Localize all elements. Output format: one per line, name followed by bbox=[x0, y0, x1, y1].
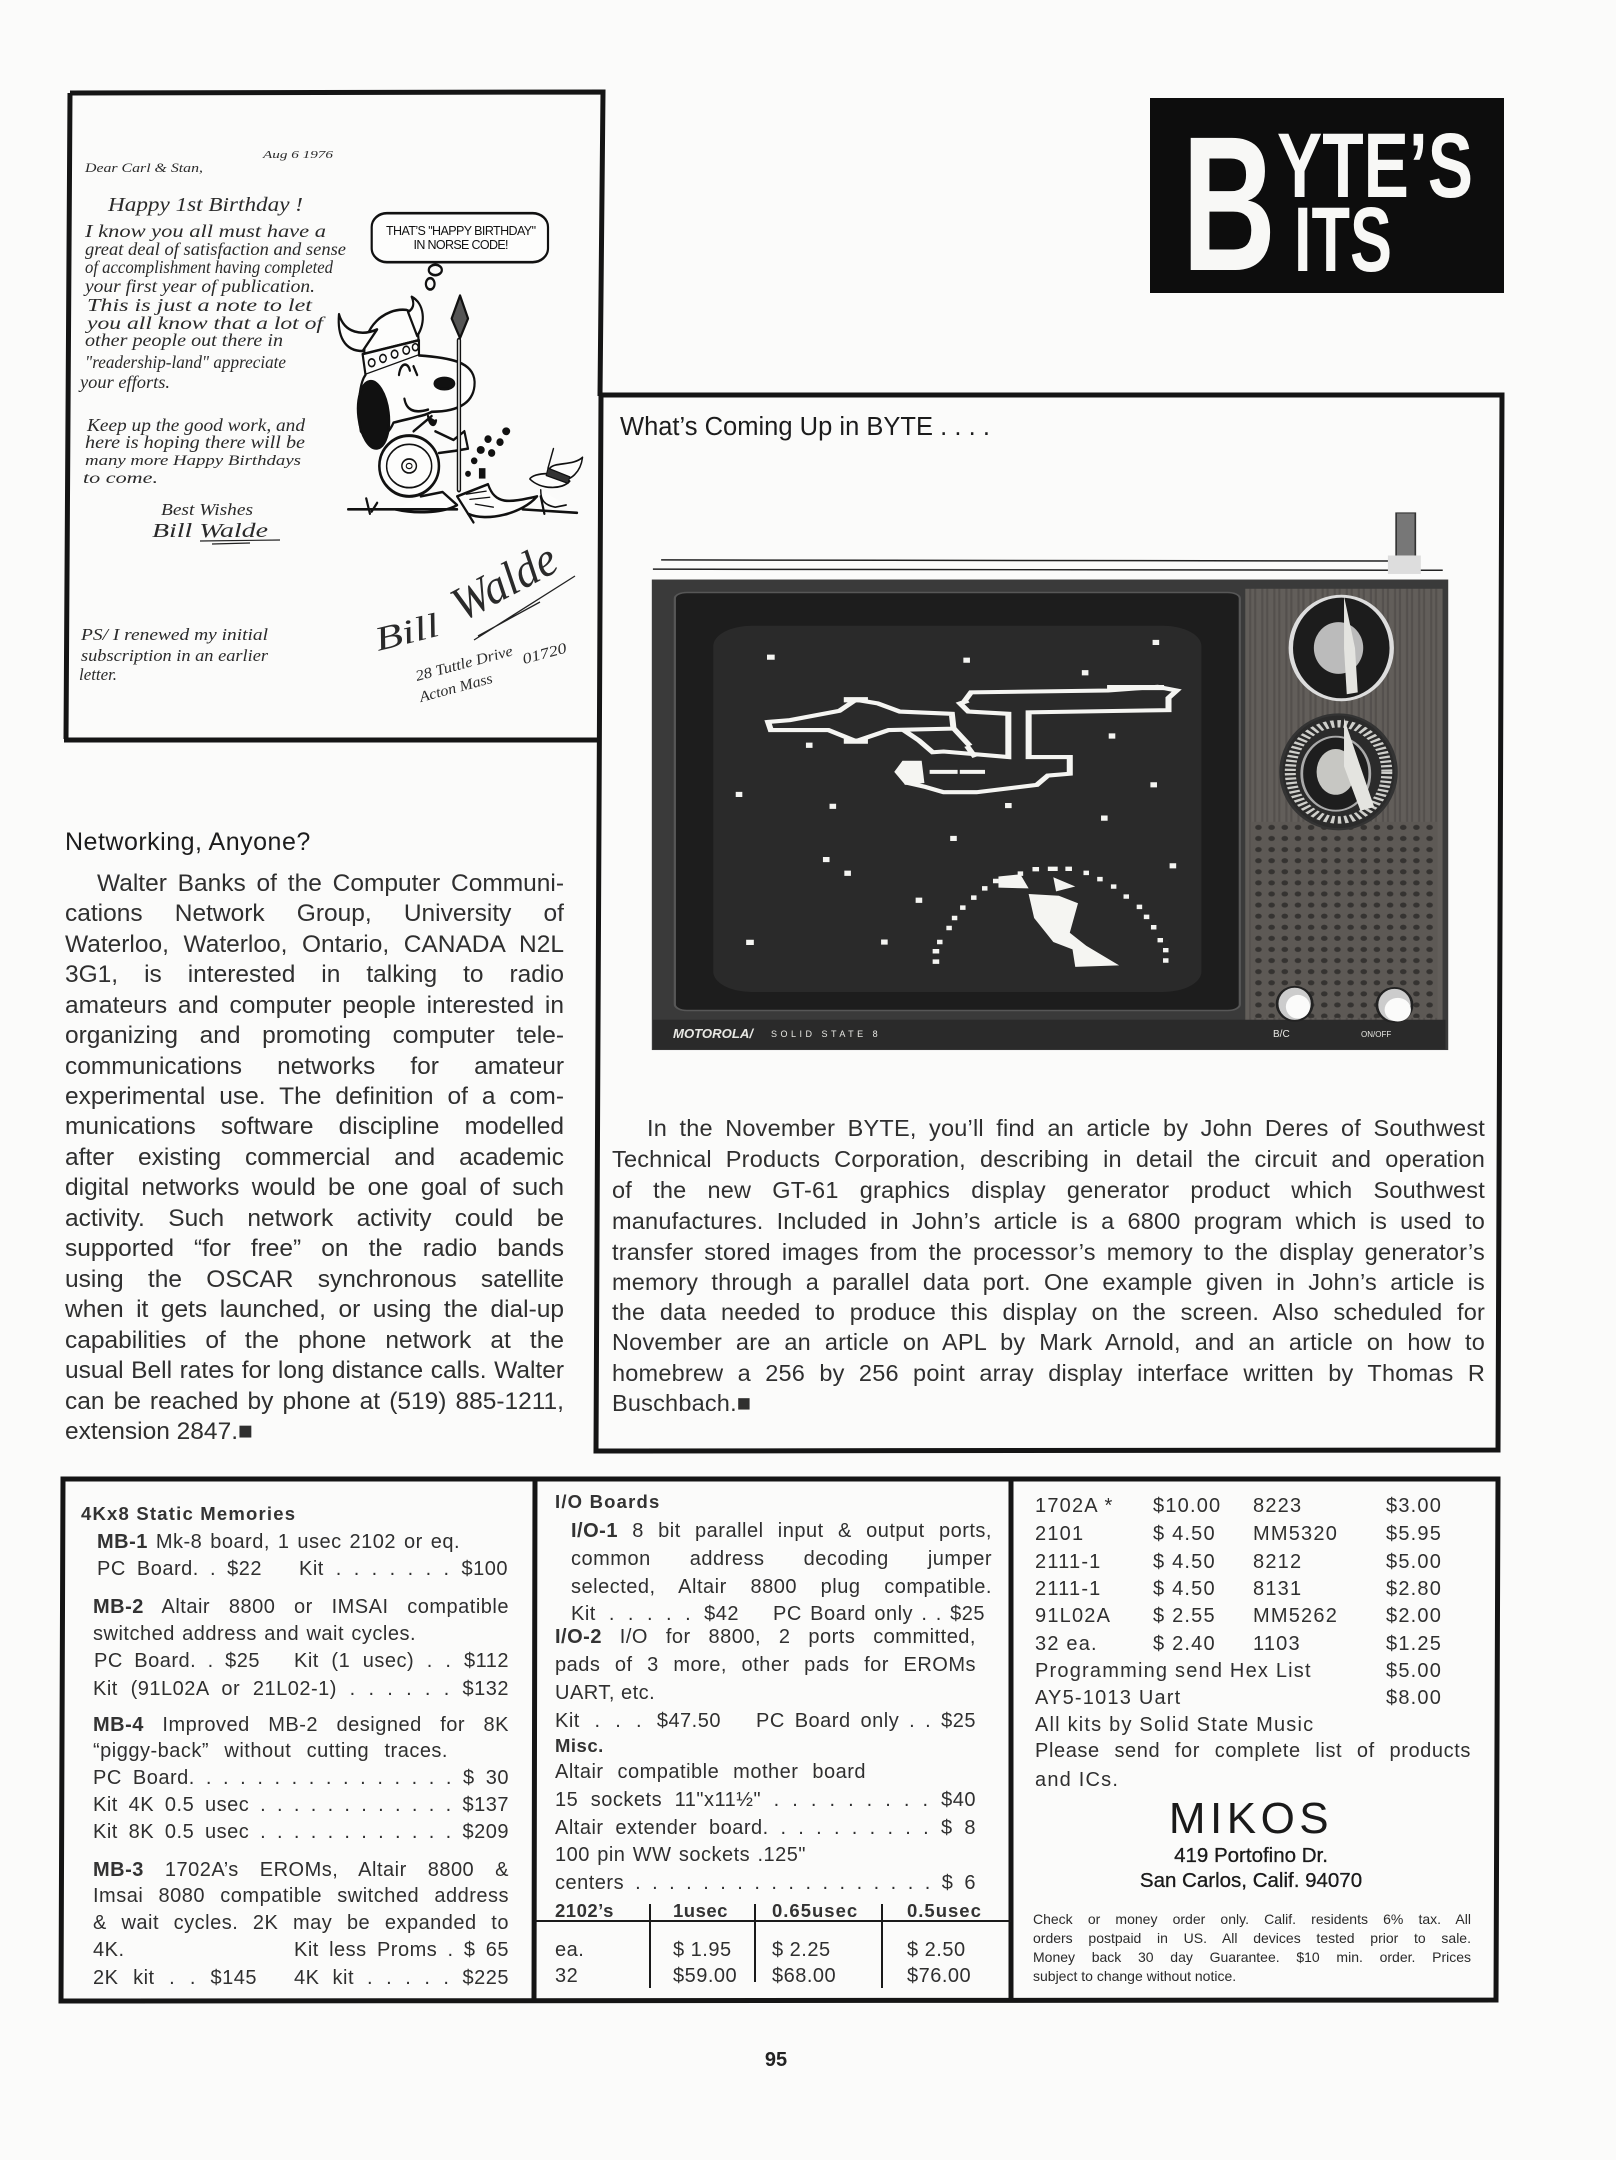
article: What's Coming Up text: Technical Products Corporation, describing in detail the circuit and operation bbox=[612, 1146, 1485, 1172]
panel: component prices and MIKOS address: Programming send Hex List bbox=[1035, 1660, 1312, 1682]
address: 419 Portofino Dr. bbox=[1174, 1844, 1328, 1867]
speech bubble text bbox=[386, 224, 536, 252]
television showing starship graphics display bbox=[652, 512, 1448, 1050]
handwritten letter text: Dear Carl & Stan, bbox=[84, 160, 203, 175]
large signature and address: Bill bbox=[371, 607, 443, 659]
starship Enterprise pixels bbox=[768, 687, 1177, 792]
heading: What's Coming Up in BYTE: What’s Coming Up in BYTE . . . . bbox=[620, 413, 990, 441]
panel: I/O boards, misc and 2102 price table: common address decoding jumper bbox=[571, 1548, 992, 1570]
table: 2102 memory prices bbox=[536, 1900, 1008, 1988]
panel: component prices and MIKOS address: $5.00 bbox=[1386, 1660, 1442, 1682]
panel: memory boards price list: Imsai 8080 compatible switched address bbox=[93, 1885, 509, 1907]
panel: component prices and MIKOS address: $1.25 bbox=[1386, 1633, 1442, 1655]
panel: memory boards price list: “piggy-back” without cutting traces. bbox=[93, 1740, 448, 1762]
panel: memory boards price list: 4Kx8 Static Memories bbox=[81, 1503, 296, 1524]
article: What's Coming Up text: manufactures. Included in John’s article is a 6800 program which is used to bbox=[612, 1208, 1485, 1234]
large signature and address: 28 Tuttle Drive bbox=[414, 643, 515, 685]
table: 2102 memory prices: $ 1.95 bbox=[673, 1939, 732, 1961]
cabinet bbox=[652, 513, 1448, 1050]
large signature and address: Acton Mass bbox=[417, 671, 495, 706]
panel: memory boards price list: Kit (91L02A or 21L02-1) . . . . . . $132 bbox=[93, 1678, 509, 1700]
screen bbox=[713, 626, 1201, 992]
handwritten letter text: of accomplishment having completed bbox=[85, 257, 334, 277]
fine print: Check or money order only. Calif. residents 6% tax. All bbox=[1033, 1911, 1471, 1927]
speech bubble text: THAT’S "HAPPY BIRTHDAY" bbox=[386, 224, 536, 238]
handwritten letter text: here is hoping there will be bbox=[85, 432, 305, 452]
panel: memory boards price list: MB-3 1702A’s EROMs, Altair 8800 & bbox=[93, 1859, 509, 1881]
logo: BYTE'S BITS bbox=[1150, 98, 1504, 293]
fine print bbox=[1033, 1911, 1471, 1984]
table: 2102 memory prices: $59.00 bbox=[673, 1965, 737, 1987]
television brand labels: MOTOROLA/ bbox=[673, 1026, 754, 1041]
panel: I/O boards, misc and 2102 price table: I/O-2 I/O for 8800, 2 ports committed, bbox=[555, 1626, 976, 1648]
handwritten letter text: Best Wishes bbox=[161, 500, 253, 519]
stars bbox=[736, 642, 1176, 942]
panel: I/O boards, misc and 2102 price table: Altair extender board. . . . . . . . . . $ 8 bbox=[555, 1817, 976, 1839]
table: 2102 memory prices: 0.65usec bbox=[772, 1900, 858, 1921]
control dials bbox=[1281, 596, 1396, 829]
panel: memory boards price list: MB-2 Altair 8800 or IMSAI compatible bbox=[93, 1596, 509, 1618]
handwritten letter text: Bill Walde bbox=[152, 520, 268, 542]
table: 2102 memory prices: 32 bbox=[555, 1965, 578, 1987]
article: What's Coming Up text: In the November BYTE, you’ll find an article by John Deres of Southwest bbox=[647, 1115, 1485, 1141]
article: Networking text: experimental use. The definition of a com- bbox=[65, 1083, 564, 1110]
panel: I/O boards, misc and 2102 price table: Kit . . . . . $42 bbox=[571, 1603, 739, 1625]
handwritten letter text: Keep up the good work, and bbox=[86, 415, 306, 435]
panel: memory boards price list: 4K. bbox=[93, 1939, 125, 1961]
panel: I/O boards, misc and 2102 price table: I/O-1 8 bit parallel input & output ports, bbox=[571, 1520, 992, 1542]
panel: component prices and MIKOS address: $8.00 bbox=[1386, 1687, 1442, 1709]
article: Networking text: supported “for free” on the radio bands bbox=[65, 1235, 564, 1262]
panel: I/O boards, misc and 2102 price table: centers . . . . . . . . . . . . . . . . . . $ 6 bbox=[555, 1872, 976, 1894]
handwritten letter text: This is just a note to let bbox=[87, 295, 313, 315]
panel: memory boards price list: 2K kit . . $145 bbox=[93, 1967, 257, 1989]
panel: component prices and MIKOS address: $ 2.55 bbox=[1153, 1605, 1216, 1627]
panel: memory boards price list: Kit 8K 0.5 usec . . . . . . . . . . . . $209 bbox=[93, 1821, 509, 1843]
panel: I/O boards, misc and 2102 price table: pads of 3 more, other pads for EROMs bbox=[555, 1654, 976, 1676]
article: Networking text: cations Network Group, University of bbox=[65, 900, 564, 927]
handwritten letter text: "readership-land" appreciate bbox=[85, 352, 286, 372]
panel: component prices and MIKOS address: $ 4.50 bbox=[1153, 1551, 1216, 1573]
panel: memory boards price list: 4K kit . . . . . $225 bbox=[294, 1967, 509, 1989]
television brand labels bbox=[673, 1026, 1391, 1041]
page number: 95 bbox=[765, 2049, 787, 2071]
panel: component prices and MIKOS address: $ 4.50 bbox=[1153, 1578, 1216, 1600]
panel: component prices and MIKOS address: $ 4.50 bbox=[1153, 1523, 1216, 1545]
article: Networking text: digital networks would be one goal of such bbox=[65, 1174, 564, 1201]
panel: memory boards price list: MB-4 Improved MB-2 designed for 8K bbox=[93, 1714, 509, 1736]
article: What's Coming Up text: of the new GT-61 graphics display generator product which Southwest bbox=[612, 1177, 1485, 1203]
panel: I/O boards, misc and 2102 price table: I/O Boards bbox=[555, 1491, 661, 1512]
article: Networking text bbox=[65, 870, 564, 1445]
article: What's Coming Up text: memory through a parallel data port. One example given in John’s article is bbox=[612, 1269, 1485, 1295]
table: 2102 memory prices: $76.00 bbox=[907, 1965, 971, 1987]
speech bubble outline bbox=[372, 213, 548, 262]
panel: component prices and MIKOS address: Please send for complete list of products bbox=[1035, 1740, 1471, 1762]
article: Networking text: communications networks for amateur bbox=[65, 1053, 564, 1080]
article: What's Coming Up text: transfer stored images from the processor’s memory to the display generator’s bbox=[612, 1239, 1485, 1265]
article: What's Coming Up text: the data needed to produce this display on the screen. Also scheduled for bbox=[612, 1299, 1485, 1325]
article: Networking text: using the OSCAR synchronous satellite bbox=[65, 1266, 564, 1293]
panel: I/O boards, misc and 2102 price table: PC Board only . . $25 bbox=[756, 1710, 976, 1732]
panel: memory boards price list: PC Board. . $22 bbox=[97, 1558, 262, 1580]
panel: component prices and MIKOS address: 2101 bbox=[1035, 1523, 1084, 1545]
panel: memory boards price list: switched address and wait cycles. bbox=[93, 1623, 416, 1645]
address: San Carlos, Calif. 94070 bbox=[1140, 1869, 1362, 1892]
handwritten letter text: you all know that a lot of bbox=[84, 313, 327, 333]
cartoon: Snoopy viking with Woodstock bbox=[339, 213, 583, 522]
handwritten letter text: PS/ I renewed my initial bbox=[80, 625, 268, 644]
fine print: orders postpaid in US. All devices tested prior to sale. bbox=[1033, 1930, 1471, 1946]
article: Networking text: organizing and promoting computer tele- bbox=[65, 1022, 564, 1049]
article: Networking text: can be reached by phone at (519) 885-1211, bbox=[65, 1388, 564, 1415]
panel: memory boards price list: Kit (1 usec) . . $112 bbox=[294, 1650, 509, 1672]
handwritten letter text: to come. bbox=[83, 470, 158, 487]
panel: component prices and MIKOS address: 1103 bbox=[1253, 1633, 1301, 1655]
panel: component prices and MIKOS address: $2.00 bbox=[1386, 1605, 1442, 1627]
table: 2102 memory prices: ea. bbox=[555, 1939, 584, 1961]
article: Networking text: activity. Such network activity could be bbox=[65, 1205, 564, 1232]
heading: Networking, Anyone?: Networking, Anyone? bbox=[65, 828, 311, 856]
handwritten letter text: subscription in an earlier bbox=[81, 646, 268, 665]
article: Networking text: munications software discipline modelled bbox=[65, 1113, 564, 1140]
large signature and address bbox=[371, 532, 575, 706]
handwritten letter text: letter. bbox=[79, 665, 117, 684]
panel: I/O boards, misc and 2102 price table: PC Board only . . $25 bbox=[773, 1603, 985, 1625]
panel: component prices and MIKOS address: $5.00 bbox=[1386, 1551, 1442, 1573]
panel: I/O boards, misc and 2102 price table: Misc. bbox=[555, 1735, 604, 1756]
panel: component prices and MIKOS address: 2111-1 bbox=[1035, 1551, 1102, 1573]
panel: component prices and MIKOS address: $3.00 bbox=[1386, 1495, 1442, 1517]
large signature and address: Walde bbox=[442, 532, 566, 632]
handwritten letter text: I know you all must have a bbox=[84, 221, 326, 241]
panel: component prices and MIKOS address: 91L02A bbox=[1035, 1605, 1111, 1627]
handwritten letter text: other people out there in bbox=[85, 330, 283, 350]
panel: component prices and MIKOS address: $10.00 bbox=[1153, 1495, 1221, 1517]
article: Networking text: extension 2847.■ bbox=[65, 1418, 253, 1445]
speech bubble text: IN NORSE CODE! bbox=[414, 238, 508, 252]
panel: component prices and MIKOS address: 1702A * bbox=[1035, 1495, 1113, 1517]
panel: component prices and MIKOS address: and ICs. bbox=[1035, 1769, 1119, 1791]
panel: memory boards price list: Kit . . . . . . . $100 bbox=[299, 1558, 508, 1580]
panel: memory boards price list bbox=[81, 1503, 509, 1989]
panel: memory boards price list: PC Board. . $25 bbox=[94, 1650, 260, 1672]
panel: I/O boards, misc and 2102 price table bbox=[536, 1491, 1008, 1988]
panel: I/O boards, misc and 2102 price table: selected, Altair 8800 plug compatible. bbox=[571, 1576, 992, 1598]
article: Networking text: usual Bell rates for long distance calls. Walter bbox=[65, 1357, 564, 1384]
fine print: subject to change without notice. bbox=[1033, 1968, 1236, 1984]
panel: component prices and MIKOS address: $ 2.40 bbox=[1153, 1633, 1216, 1655]
table: 2102 memory prices: 2102’s bbox=[555, 1900, 614, 1921]
table: 2102 memory prices: 0.5usec bbox=[907, 1900, 982, 1921]
television brand labels: ON/OFF bbox=[1361, 1030, 1391, 1039]
table: 2102 memory prices: $ 2.25 bbox=[772, 1939, 831, 1961]
panel: I/O boards, misc and 2102 price table: Kit . . . $47.50 bbox=[555, 1710, 721, 1732]
large signature and address: 01720 bbox=[521, 641, 569, 668]
panel: I/O boards, misc and 2102 price table: 15 sockets 11"x11½" . . . . . . . . . $40 bbox=[555, 1789, 976, 1811]
table: 2102 memory prices: 1usec bbox=[673, 1900, 728, 1921]
article: Networking text: 3G1, is interested in talking to radio bbox=[65, 961, 564, 988]
screen bezel bbox=[675, 592, 1240, 1010]
panel: handwritten birthday letter with Snoopy cartoon bbox=[78, 149, 584, 706]
panel: component prices and MIKOS address: 8212 bbox=[1253, 1551, 1302, 1573]
article: Networking text: capabilities of the phone network at the bbox=[65, 1327, 564, 1354]
television brand labels: SOLID STATE 8 bbox=[771, 1029, 881, 1039]
article: Networking text: Waterloo, Waterloo, Ontario, CANADA N2L bbox=[65, 931, 564, 958]
panel: component prices and MIKOS address: $5.95 bbox=[1386, 1523, 1442, 1545]
panel: component prices and MIKOS address: 2111-1 bbox=[1035, 1578, 1102, 1600]
panel: memory boards price list: Kit less Proms . $ 65 bbox=[294, 1939, 509, 1961]
panel: component prices and MIKOS address: AY5-1013 Uart bbox=[1035, 1687, 1181, 1709]
logo: BYTE'S BITS: ITS bbox=[1294, 189, 1392, 291]
article: Networking text: after existing commercial and academic bbox=[65, 1144, 564, 1171]
article: Networking text: amateurs and computer people interested in bbox=[65, 992, 564, 1019]
article: Networking text: when it gets launched, or using the dial-up bbox=[65, 1296, 564, 1323]
panel: component prices and MIKOS address: MM5320 bbox=[1253, 1523, 1338, 1545]
panel: component prices and MIKOS address: 8131 bbox=[1253, 1578, 1302, 1600]
handwritten letter text: great deal of satisfaction and sense bbox=[85, 239, 346, 259]
article: What's Coming Up text: homebrew a 256 by 256 point array display interface written by Thomas R bbox=[612, 1360, 1485, 1386]
table: 2102 memory prices: $68.00 bbox=[772, 1965, 836, 1987]
article: What's Coming Up text: November are an article on APL by Mark Arnold, and an article on how to bbox=[612, 1329, 1485, 1355]
panel: component prices and MIKOS address: 8223 bbox=[1253, 1495, 1302, 1517]
panel: I/O boards, misc and 2102 price table: Altair compatible mother board bbox=[555, 1761, 866, 1783]
handwritten letter text: your efforts. bbox=[78, 372, 170, 392]
article: What's Coming Up text bbox=[612, 1115, 1485, 1416]
panel: memory boards price list: MB-1 Mk-8 board, 1 usec 2102 or eq. bbox=[97, 1531, 460, 1553]
handwritten letter text: Aug 6 1976 bbox=[262, 149, 334, 161]
handwritten letter text: your first year of publication. bbox=[83, 276, 315, 296]
television brand labels: B/C bbox=[1273, 1029, 1290, 1040]
panel: component prices and MIKOS address: MM5262 bbox=[1253, 1605, 1338, 1627]
handwritten letter text bbox=[78, 149, 346, 684]
address bbox=[1140, 1844, 1362, 1892]
panel: memory boards price list: Kit 4K 0.5 usec . . . . . . . . . . . . $137 bbox=[93, 1794, 509, 1816]
table: 2102 memory prices: $ 2.50 bbox=[907, 1939, 966, 1961]
panel: component prices and MIKOS address: $2.80 bbox=[1386, 1578, 1442, 1600]
panel: memory boards price list: PC Board. . . . . . . . . . . . . . . . $ 30 bbox=[93, 1767, 509, 1789]
article: What's Coming Up text: Buschbach.■ bbox=[612, 1390, 751, 1416]
panel: I/O boards, misc and 2102 price table: 100 pin WW sockets .125" bbox=[555, 1844, 806, 1866]
handwritten letter text: Happy 1st Birthday ! bbox=[107, 194, 303, 216]
panel: component prices and MIKOS address: 32 ea. bbox=[1035, 1633, 1098, 1655]
brand: MIKOS: MIKOS bbox=[1169, 1794, 1333, 1843]
panel: I/O boards, misc and 2102 price table: UART, etc. bbox=[555, 1682, 655, 1704]
panel: component prices and MIKOS address: All kits by Solid State Music bbox=[1035, 1714, 1314, 1736]
panel: component prices and MIKOS address bbox=[1033, 1495, 1471, 1984]
panel: memory boards price list: & wait cycles. 2K may be expanded to bbox=[93, 1912, 509, 1934]
fine print: Money back 30 day Guarantee. $10 min. order. Prices bbox=[1033, 1949, 1471, 1965]
handwritten letter text: many more Happy Birthdays bbox=[85, 453, 301, 469]
article: Networking text: Walter Banks of the Computer Communi- bbox=[97, 870, 564, 897]
push knobs bbox=[1277, 987, 1412, 1022]
earth arc bbox=[933, 869, 1168, 962]
